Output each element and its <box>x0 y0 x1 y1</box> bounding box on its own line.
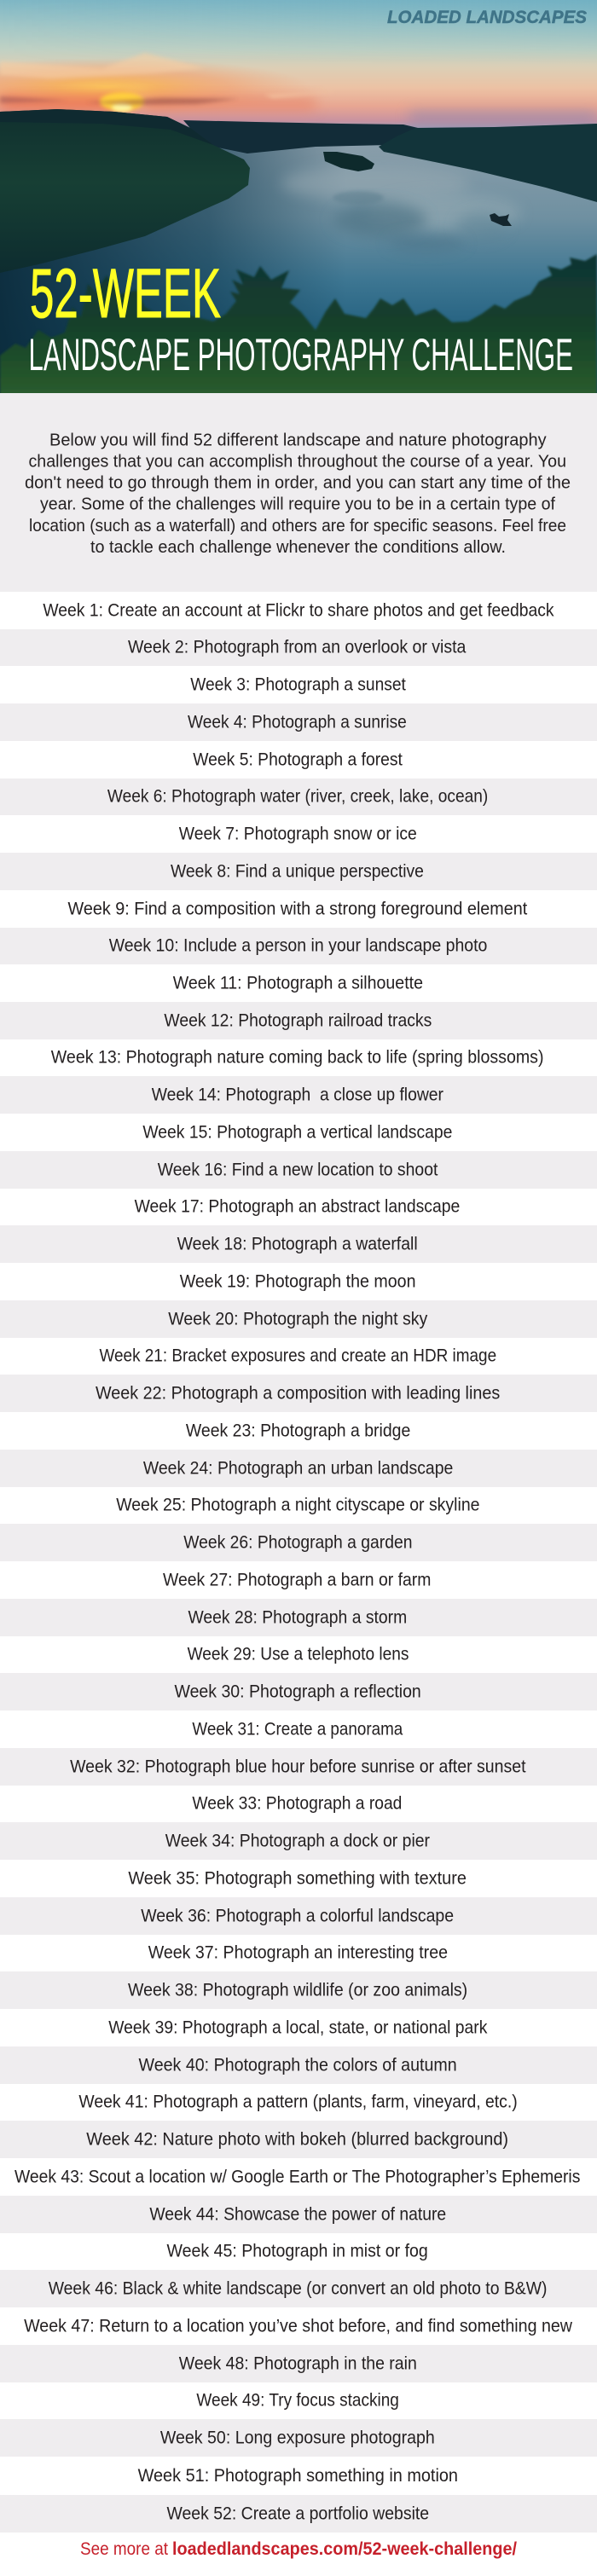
week 46: Week 46: Black & white landscape (or convert an old photo to B&W) <box>49 2278 547 2299</box>
week 41 <box>0 2084 597 2121</box>
week 15 <box>0 1114 597 1151</box>
week 10: Week 10: Include a person in your landscape photo <box>109 935 487 955</box>
week 29: Week 29: Use a telephoto lens <box>188 1644 409 1664</box>
week 51 <box>0 2457 597 2495</box>
week 45: Week 45: Photograph in mist or fog <box>167 2241 428 2261</box>
week 25: Week 25: Photograph a night cityscape or skyline <box>116 1494 479 1514</box>
week 4: Week 4: Photograph a sunrise <box>188 711 407 732</box>
week 17 <box>0 1189 597 1225</box>
footer link: See more at <box>80 2538 168 2559</box>
week 39 <box>0 2009 597 2046</box>
week 37: Week 37: Photograph an interesting tree <box>148 1942 448 1963</box>
week 43 <box>0 2158 597 2196</box>
right hill <box>379 124 597 202</box>
week 39: Week 39: Photograph a local, state, or national park <box>108 2017 488 2038</box>
logo: Loaded Landscapes: LOADED LANDSCAPES <box>387 8 587 27</box>
week 2: Week 2: Photograph from an overlook or vista <box>128 636 466 657</box>
week 40 <box>0 2046 597 2084</box>
week 28: Week 28: Photograph a storm <box>188 1606 407 1627</box>
week 26: Week 26: Photograph a garden <box>183 1531 412 1552</box>
week 16 <box>0 1151 597 1189</box>
week 24: Week 24: Photograph an urban landscape <box>143 1458 453 1479</box>
week 20: Week 20: Photograph the night sky <box>168 1308 428 1329</box>
week 24 <box>0 1450 597 1487</box>
week 12: Week 12: Photograph railroad tracks <box>164 1010 432 1030</box>
week 30 <box>0 1673 597 1711</box>
week 52: Week 52: Create a portfolio website <box>167 2504 429 2524</box>
week 28 <box>0 1599 597 1636</box>
panel: introduction: don't need to go through them in order, and you can start any time of the <box>25 474 571 493</box>
distant hills <box>183 120 418 153</box>
week 48 <box>0 2345 597 2382</box>
week 15: Week 15: Photograph a vertical landscape <box>142 1122 452 1143</box>
panel: introduction: location (such as a waterfall) and others are for specific seasons. Feel free <box>29 517 566 535</box>
week 37 <box>0 1935 597 1971</box>
week 41: Week 41: Photograph a pattern (plants, farm, vineyard, etc.) <box>78 2091 518 2111</box>
week 44 <box>0 2196 597 2233</box>
week 49: Week 49: Try focus stacking <box>196 2389 399 2410</box>
sunset glow <box>0 53 597 124</box>
week 38: Week 38: Photograph wildlife (or zoo animals) <box>128 1980 467 2000</box>
week 13 <box>0 1039 597 1076</box>
week 40: Week 40: Photograph the colors of autumn <box>138 2055 457 2075</box>
week 16: Week 16: Find a new location to shoot <box>158 1160 438 1180</box>
week 21 <box>0 1338 597 1375</box>
week 47 <box>0 2307 597 2345</box>
week 30: Week 30: Photograph a reflection <box>174 1682 421 1702</box>
week 8: Week 8: Find a unique perspective <box>171 861 424 882</box>
left hill ridge shadow <box>0 109 213 145</box>
week 18: Week 18: Photograph a waterfall <box>177 1233 418 1253</box>
week 3 <box>0 666 597 703</box>
week 21: Week 21: Bracket exposures and create an HDR image <box>99 1346 496 1366</box>
week 32: Week 32: Photograph blue hour before sunrise or after sunset <box>70 1757 526 1777</box>
week 27 <box>0 1561 597 1599</box>
week 13: Week 13: Photograph nature coming back to life (spring blossoms) <box>51 1047 544 1068</box>
week 34 <box>0 1822 597 1860</box>
week 35 <box>0 1860 597 1897</box>
week 33 <box>0 1786 597 1822</box>
panel: introduction: to tackle each challenge whenever the conditions allow. <box>90 538 506 557</box>
week 9: Week 9: Find a composition with a strong foreground element <box>68 899 527 919</box>
panel: introduction <box>0 393 597 592</box>
week 19: Week 19: Photograph the moon <box>180 1271 415 1291</box>
week 22: Week 22: Photograph a composition with leading lines <box>96 1383 500 1404</box>
week 10 <box>0 928 597 964</box>
week 17: Week 17: Photograph an abstract landscape <box>135 1195 460 1216</box>
week 33: Week 33: Photograph a road <box>192 1792 402 1813</box>
week 51: Week 51: Photograph something in motion <box>138 2465 458 2486</box>
week 48: Week 48: Photograph in the rain <box>179 2353 417 2374</box>
river <box>0 143 597 393</box>
week 9 <box>0 890 597 928</box>
panel: introduction: year. Some of the challenges will require you to be in a certain type of <box>40 495 555 514</box>
panel: 52-week list <box>0 592 597 2533</box>
week 23: Week 23: Photograph a bridge <box>186 1421 410 1441</box>
panel: introduction: challenges that you can accomplish throughout the course of a year. You <box>29 453 566 472</box>
week 26 <box>0 1524 597 1561</box>
week 46 <box>0 2270 597 2307</box>
week 20 <box>0 1300 597 1338</box>
week 19 <box>0 1263 597 1300</box>
week 6: Week 6: Photograph water (river, creek, lake, ocean) <box>107 786 488 807</box>
week 49 <box>0 2382 597 2419</box>
week 7 <box>0 815 597 853</box>
week 5: Week 5: Photograph a forest <box>193 749 403 769</box>
week 50: Week 50: Long exposure photograph <box>160 2427 435 2447</box>
island <box>323 152 374 171</box>
week 1 <box>0 592 597 629</box>
week 27: Week 27: Photograph a barn or farm <box>163 1569 431 1589</box>
week 42 <box>0 2121 597 2158</box>
week 14: Week 14: Photograph a close up flower <box>152 1085 443 1105</box>
week 32 <box>0 1748 597 1786</box>
week 12 <box>0 1002 597 1039</box>
week 52 <box>0 2495 597 2533</box>
week 8 <box>0 853 597 890</box>
sky <box>0 0 597 130</box>
title: 52-week: 52-WEEK <box>30 255 221 333</box>
week 31 <box>0 1711 597 1748</box>
header photo: sunset over river valley <box>0 0 597 401</box>
week 31: Week 31: Create a panorama <box>192 1719 403 1740</box>
week 36: Week 36: Photograph a colorful landscape <box>141 1905 454 1925</box>
week 42: Week 42: Nature photo with bokeh (blurred background) <box>86 2128 508 2149</box>
footer link: loadedlandscapes.com/52-week-challenge/ <box>172 2538 517 2559</box>
week 11: Week 11: Photograph a silhouette <box>173 972 423 993</box>
week 18 <box>0 1225 597 1263</box>
week 3: Week 3: Photograph a sunset <box>190 674 406 694</box>
week 7: Week 7: Photograph snow or ice <box>179 824 417 844</box>
left hill <box>0 109 250 273</box>
week 44: Week 44: Showcase the power of nature <box>149 2203 446 2224</box>
week 45 <box>0 2233 597 2270</box>
week 36 <box>0 1897 597 1935</box>
foreground trees <box>0 254 597 401</box>
week 14 <box>0 1076 597 1114</box>
week 29 <box>0 1636 597 1673</box>
week 22 <box>0 1375 597 1412</box>
week 50 <box>0 2419 597 2457</box>
week 35: Week 35: Photograph something with texture <box>128 1867 467 1888</box>
week 38 <box>0 1971 597 2009</box>
week 25 <box>0 1487 597 1524</box>
rock in water <box>490 213 512 226</box>
week 23 <box>0 1412 597 1450</box>
week 6 <box>0 779 597 815</box>
week 34: Week 34: Photograph a dock or pier <box>165 1830 430 1850</box>
week 2 <box>0 629 597 666</box>
week 4 <box>0 703 597 741</box>
week 1: Week 1: Create an account at Flickr to share photos and get feedback <box>43 600 554 621</box>
week 11 <box>0 964 597 1002</box>
week 5 <box>0 741 597 779</box>
panel: introduction: Below you will find 52 different landscape and nature photography <box>49 431 547 450</box>
